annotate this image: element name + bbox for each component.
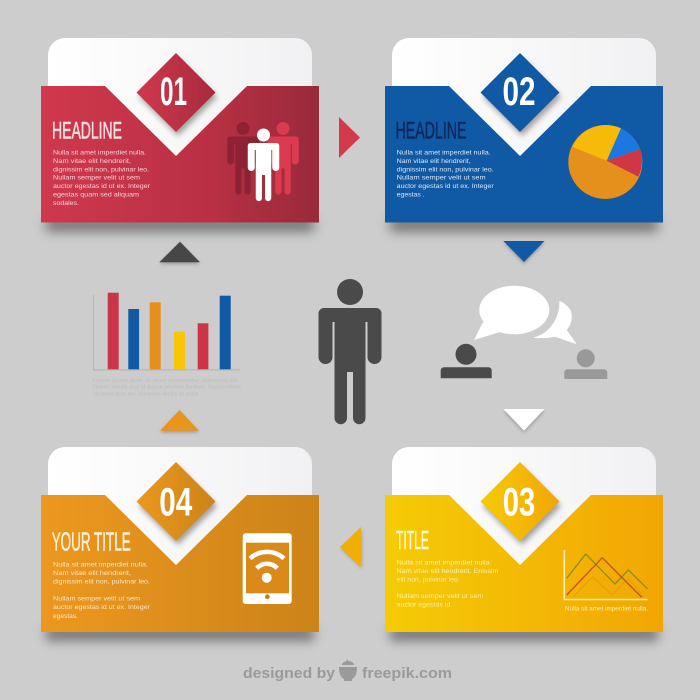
icon: conversation [441, 286, 607, 379]
icon: large person [318, 279, 382, 424]
number badge 02 [480, 53, 560, 132]
text block: card 01: sodales. [53, 200, 79, 207]
footer: attribution: freepik.com [362, 665, 452, 682]
arrow: red right [339, 117, 360, 158]
text block: card 04: egestas. [53, 613, 78, 620]
text block: card 02: egestas . [397, 192, 425, 198]
icon: group of people [227, 122, 299, 201]
icon: freepik mark [339, 659, 357, 681]
text block: card 02: Nullam semper velit ut sem [397, 175, 486, 182]
arrow: blue down [503, 241, 544, 264]
text block: card 02: Nam vitae elit hendrerit, [397, 158, 471, 165]
panel: card 04 [41, 447, 319, 641]
text block: card 01: auctor egestas id ut ex. Integer [53, 183, 151, 190]
text block: card 01: dignissim elit non, pulvinar leo. [53, 166, 149, 173]
number badge 01: 01 [160, 70, 187, 114]
text block: card 04: Nullam semper velit ut sem [53, 596, 140, 602]
line chart caption: Nulla sit amet imperdiet nulla. [565, 606, 648, 612]
text block: card 04: Nam vitae elit hendrerit, [53, 570, 131, 577]
number badge 02: 02 [502, 70, 536, 114]
panel: card 03: TITLE [396, 525, 429, 555]
text block: card 02: dignissim elit non, pulvinar leo. [397, 166, 494, 173]
text block: card 02: auctor egestas id ut ex. Integer [397, 183, 494, 190]
number badge 03: 03 [503, 480, 535, 524]
text block: card 01 [53, 150, 151, 207]
number badge 01 [136, 53, 216, 132]
text block: card 02: Nulla sit amet imperdiet nulla. [397, 150, 491, 156]
arrow: orange up [160, 410, 199, 432]
text block: card 03: Nam vitae elit hendrerit, Enissim [397, 568, 499, 575]
icon: tablet with wifi [243, 533, 292, 604]
number badge 03 [480, 462, 560, 541]
text block: card 04 [53, 562, 151, 620]
number badge 04 [136, 462, 216, 541]
footer: attribution [243, 659, 452, 682]
text block: card 03 [397, 560, 499, 608]
text block: card 04: auctor egestas id ut ex. Integer [53, 604, 151, 611]
text block: bar chart caption: sit amet quis leo. Vivamus mollis et nulla [93, 392, 198, 398]
text block: card 03: Nullam semper velit ut sem [397, 593, 484, 600]
arrow: white down [503, 409, 544, 432]
footer: attribution: designed by [243, 665, 336, 682]
heading: card 01: HEADLINE [52, 118, 122, 144]
text block: card 01: Nullam semper velit ut sem [53, 175, 140, 182]
text block: card 03: auctor egestas id. [397, 601, 453, 608]
text block: card 04: dignissim elit non, pulvinar leo. [53, 578, 150, 585]
text block: card 03: Nulla sit amet imperdiet nulla. [397, 560, 492, 566]
text block: card 02 [397, 150, 494, 198]
heading: card 02: HEADLINE [396, 118, 466, 144]
text block: card 01: Nulla sit amet imperdiet nulla. [53, 150, 146, 156]
text block: card 03: elit non, pulvinar leo. [397, 576, 460, 583]
text block: bar chart caption: Lorem ipsum dolor sit amet consectetur adipiscing elit. [93, 378, 239, 384]
line chart [564, 550, 648, 612]
text block: card 04: Nulla sit amet imperdiet nulla. [53, 562, 148, 568]
pie chart [568, 125, 642, 199]
panel: card 03 [385, 447, 663, 641]
panel: card 02 [385, 38, 663, 232]
text block: bar chart caption [93, 378, 241, 398]
text block: bar chart caption: Donec iaculis erat id augue pretium facilisis. Suspendisse [93, 385, 241, 391]
text block: card 01: Nam vitae elit hendrerit, [53, 158, 131, 165]
number badge 04: 04 [159, 480, 193, 524]
arrow: yellow left [340, 527, 362, 569]
heading: card 04: YOUR TITLE [52, 526, 131, 556]
panel: card 01 [41, 38, 319, 232]
bar chart [93, 293, 240, 370]
text block: card 01: egestas quam sed aliquam [53, 192, 139, 198]
arrow: dark up [159, 242, 200, 264]
